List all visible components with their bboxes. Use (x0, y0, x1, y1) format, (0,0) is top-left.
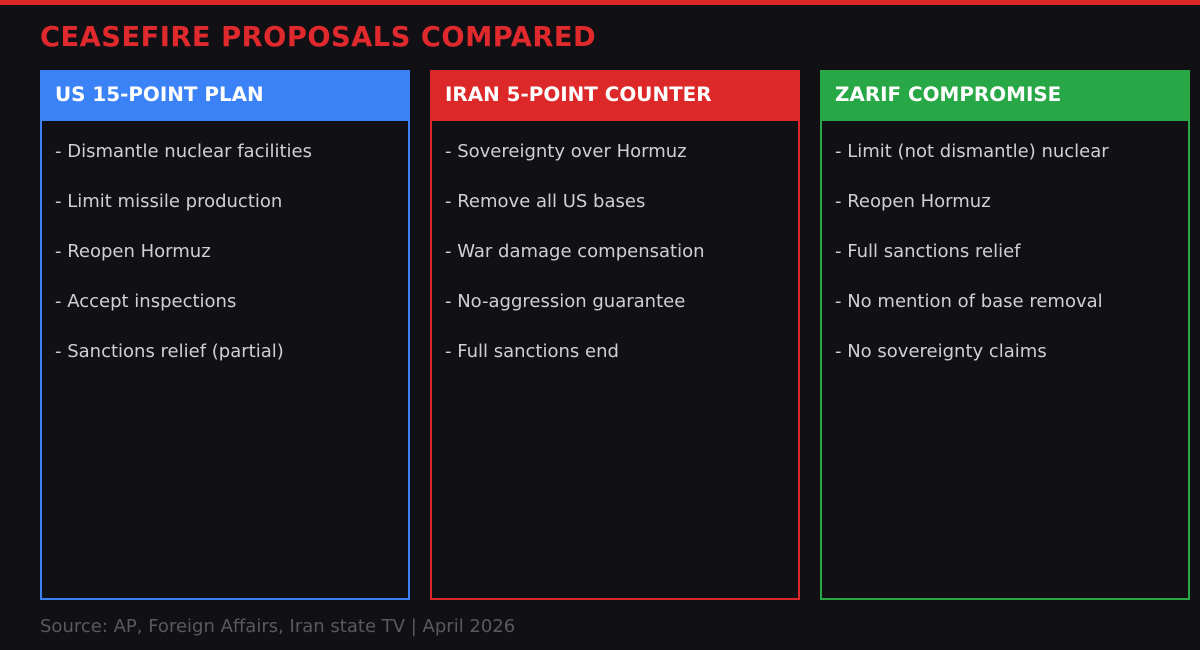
panel: Zarif compromise (820, 70, 1190, 600)
panel: Iran 5-point counter: - Full sanctions end (445, 341, 619, 362)
panel: Zarif compromise: - No mention of base removal (835, 291, 1103, 312)
header: Iran: IRAN 5-POINT COUNTER (445, 83, 712, 106)
item list: Zarif (835, 141, 1109, 362)
panel: US 15-point plan: - Limit missile production (55, 191, 282, 212)
panel: Zarif compromise: - Reopen Hormuz (835, 191, 991, 212)
header: Iran (432, 72, 798, 121)
panel: US 15-point plan: - Sanctions relief (partial) (55, 341, 284, 362)
panel: US 15-point plan: - Reopen Hormuz (55, 241, 211, 262)
panel: Iran 5-point counter (430, 70, 800, 600)
panel: Zarif compromise: - No sovereignty claims (835, 341, 1047, 362)
panel: Iran 5-point counter: - Sovereignty over Hormuz (445, 141, 687, 162)
source note: Source: AP, Foreign Affairs, Iran state TV | April 2026 (40, 616, 515, 637)
item list: Iran (445, 141, 704, 362)
panel: US 15-point plan: - Accept inspections (55, 291, 236, 312)
panel: Iran 5-point counter: - No-aggression guarantee (445, 291, 685, 312)
header: US (42, 72, 408, 121)
panel: US 15-point plan: - Dismantle nuclear facilities (55, 141, 312, 162)
panel: Zarif compromise: - Limit (not dismantle) nuclear (835, 141, 1109, 162)
item list: US (55, 141, 312, 362)
panel: US 15-point plan (40, 70, 410, 600)
header: US: US 15-POINT PLAN (55, 83, 264, 106)
title: CEASEFIRE PROPOSALS COMPARED (40, 22, 596, 53)
panel: Iran 5-point counter: - War damage compensation (445, 241, 704, 262)
panel: Zarif compromise: - Full sanctions relief (835, 241, 1021, 262)
header: Zarif: ZARIF COMPROMISE (835, 83, 1061, 106)
header: Zarif (822, 72, 1188, 121)
panel: Iran 5-point counter: - Remove all US bases (445, 191, 645, 212)
